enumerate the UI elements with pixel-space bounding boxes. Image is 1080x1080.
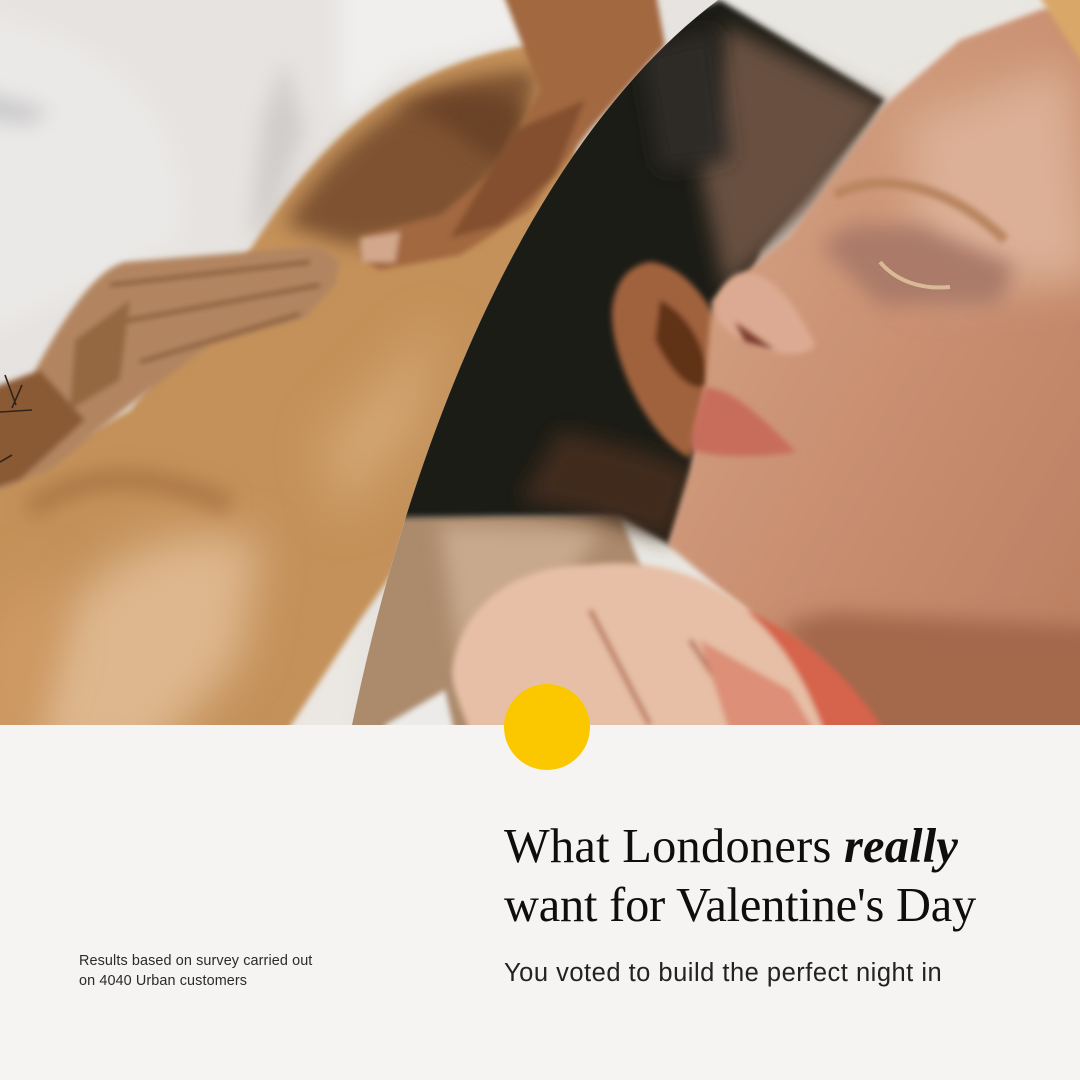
closed eye <box>820 225 1015 305</box>
yellow circle accent <box>504 684 590 770</box>
heading: What Londoners really <box>504 820 958 873</box>
hair <box>1036 0 1080 60</box>
hand on the lower back <box>0 246 340 505</box>
man's shoulder <box>352 514 644 725</box>
heading: want for Valentine's Day <box>504 879 976 932</box>
hand on top of shoulder <box>358 0 665 270</box>
back and shoulder <box>0 42 600 765</box>
photo: couple embracing <box>320 0 1080 765</box>
woman's hand <box>382 560 884 725</box>
towel <box>0 0 516 230</box>
woman's neck <box>782 605 1080 725</box>
woman's face <box>665 6 1080 648</box>
photo: massage on a bare back <box>0 0 718 725</box>
man's neck and head <box>375 0 885 545</box>
ear <box>612 262 730 458</box>
heading <box>504 820 976 932</box>
photo collage: massage and couple <box>0 0 1080 725</box>
survey note: Results based on survey carried out <box>79 953 312 969</box>
nose <box>716 273 815 354</box>
lips <box>692 388 796 456</box>
subheading: You voted to build the perfect night in <box>504 959 942 987</box>
survey note: on 4040 Urban customers <box>79 973 247 989</box>
survey note <box>79 953 312 989</box>
eyebrow <box>835 183 1005 240</box>
wrist tattoo <box>0 375 32 462</box>
